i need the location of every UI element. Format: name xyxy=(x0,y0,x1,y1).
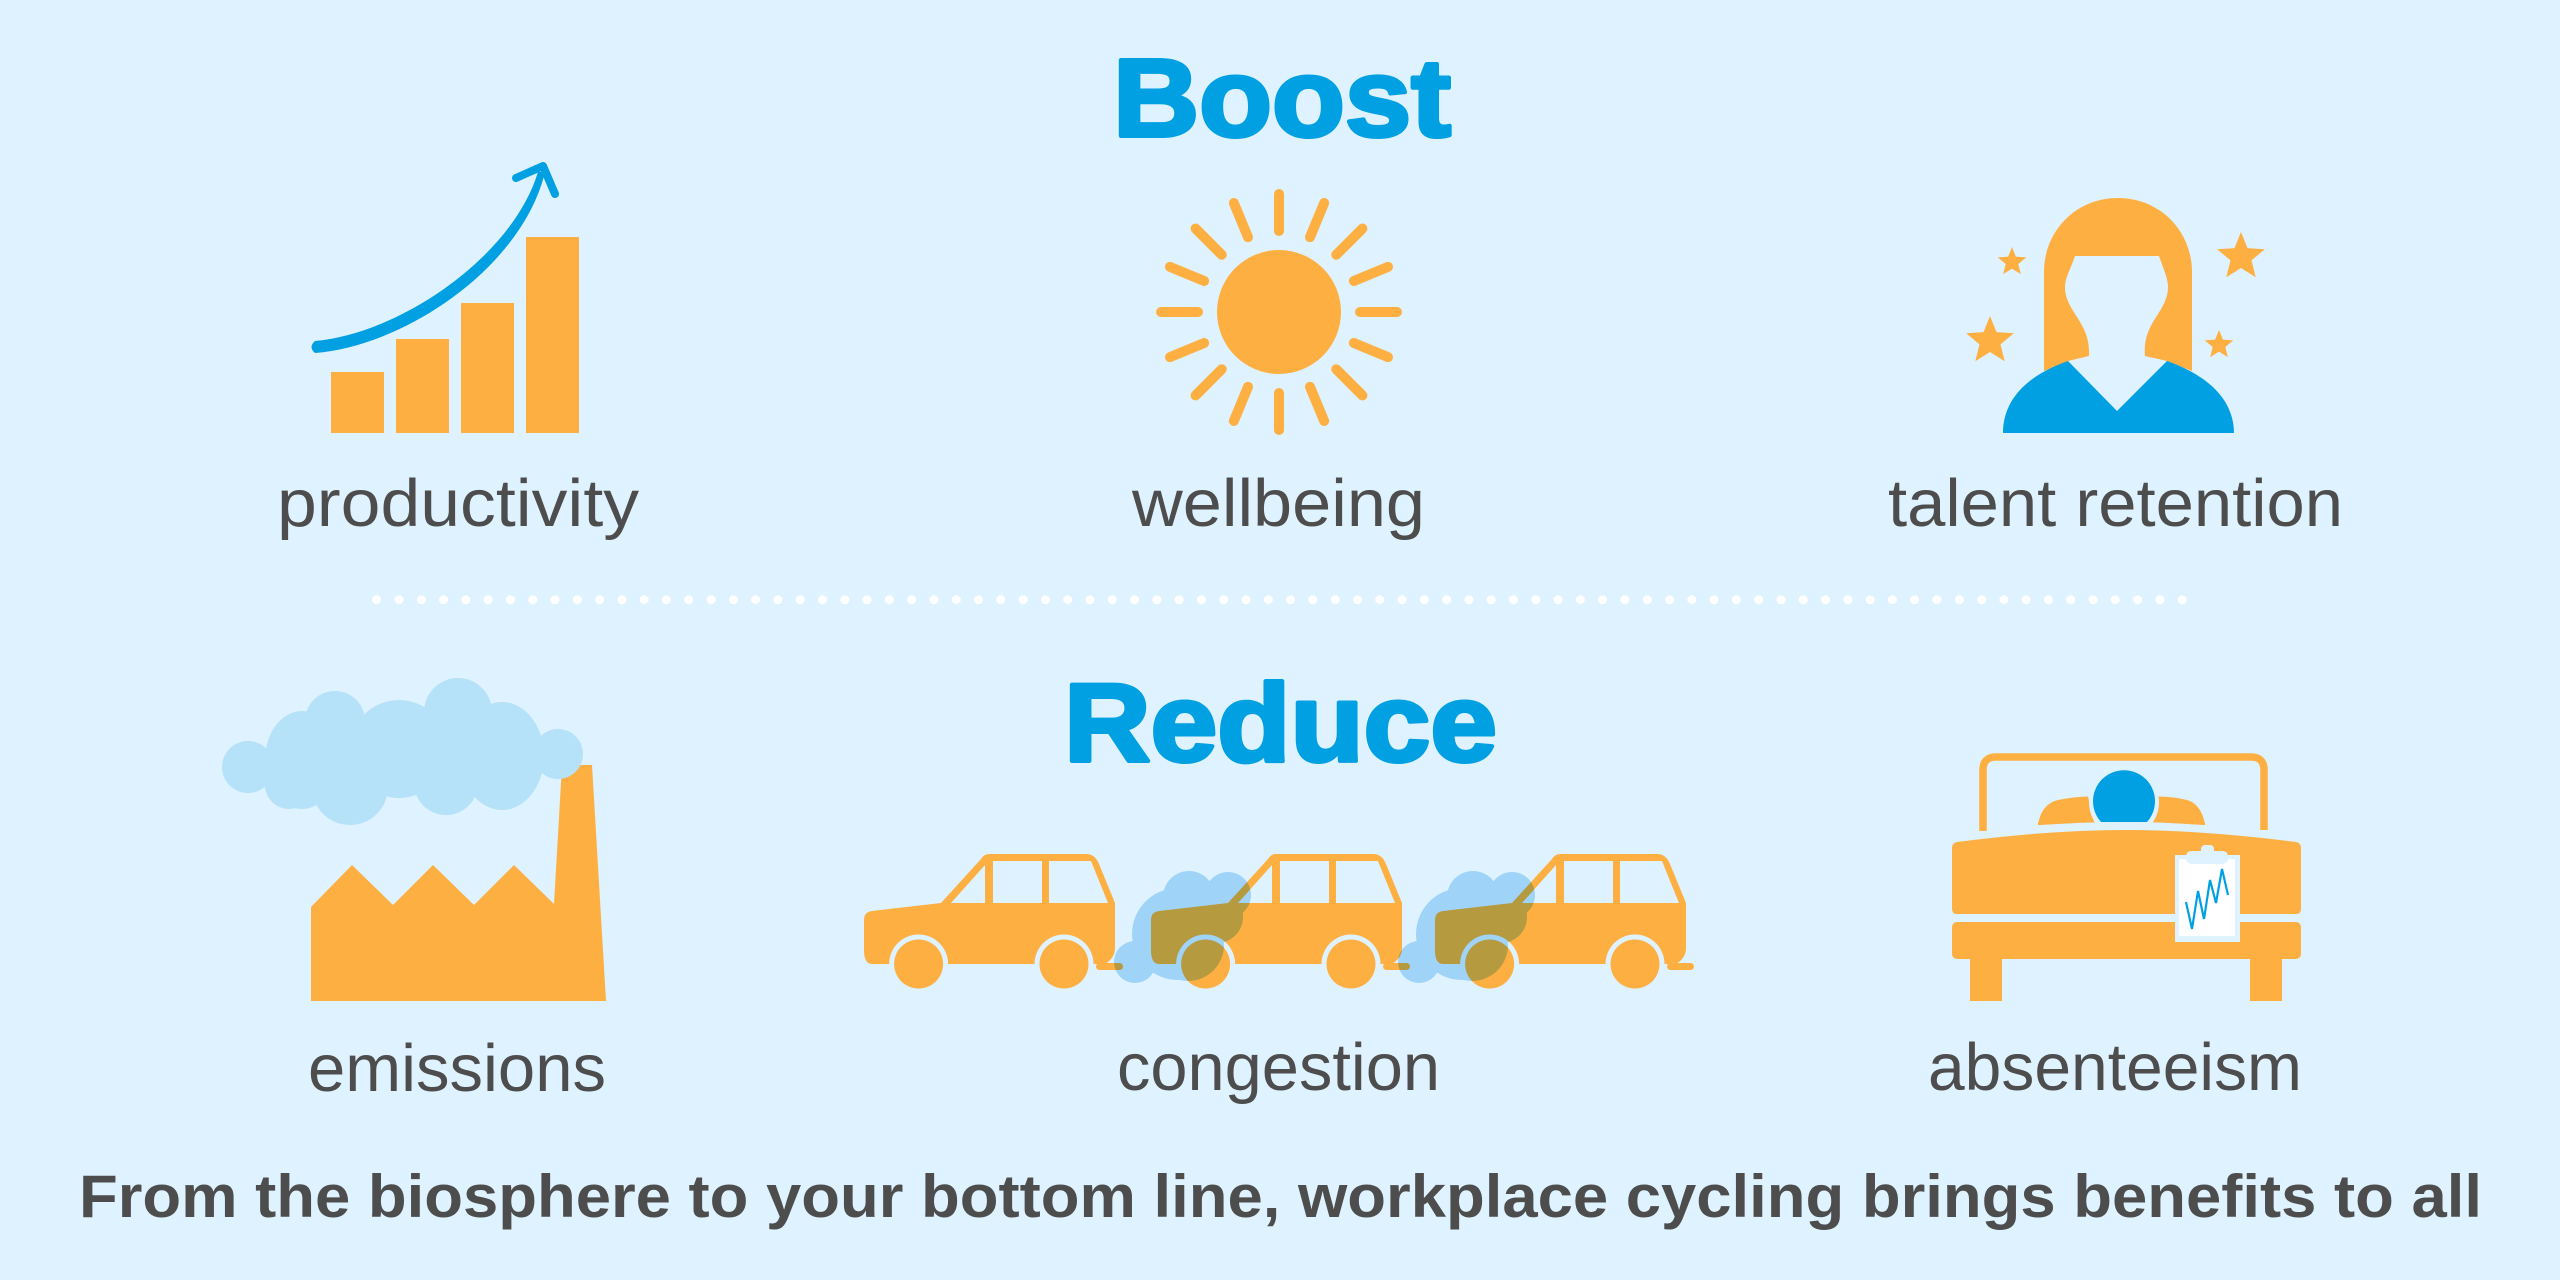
label: congestion: congestion xyxy=(1117,1030,1440,1105)
medical chart clipboard xyxy=(2175,845,2240,942)
icon: factory with smoke cloud for emissions xyxy=(222,678,606,1001)
icon: productivity bar chart with rising arrow xyxy=(312,166,579,433)
car 2 xyxy=(1151,854,1410,994)
icon: three cars with exhaust smoke for congestion xyxy=(864,854,1694,994)
label: wellbeing: wellbeing xyxy=(1131,466,1425,541)
car 3 xyxy=(1435,854,1694,994)
label: absenteeism: absenteeism xyxy=(1928,1030,2302,1105)
heading: Boost: Boost xyxy=(1113,37,1451,160)
exhaust smoke behind car 3 xyxy=(1398,871,1535,983)
heading: Reduce: Reduce xyxy=(1064,662,1497,785)
label: productivity: productivity xyxy=(277,466,640,541)
label: talent retention: talent retention xyxy=(1888,466,2343,541)
exhaust smoke behind car 2 xyxy=(1114,871,1251,983)
icon: woman surrounded by stars for talent retention xyxy=(1966,198,2265,433)
icon: sick person in bed with medical chart for absenteeism xyxy=(1952,757,2301,1001)
icon: sun for wellbeing xyxy=(1161,194,1397,430)
label: emissions: emissions xyxy=(308,1031,606,1106)
car 1 xyxy=(864,854,1123,994)
closing statement: From the biosphere to your bottom line, workplace cycling brings benefits to all xyxy=(79,1163,2482,1230)
